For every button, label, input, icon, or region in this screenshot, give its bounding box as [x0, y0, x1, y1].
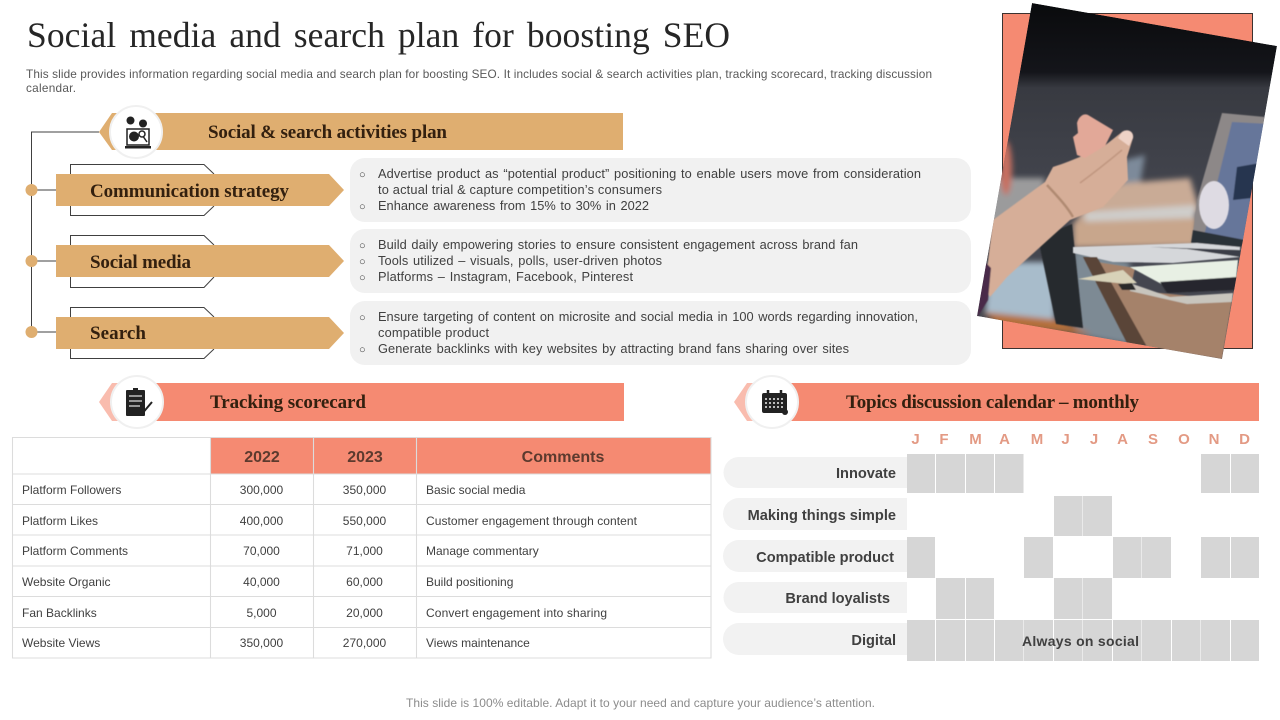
- category: social media: Social media: [90, 252, 192, 273]
- table 2023 values: 350,000: [343, 483, 387, 497]
- calendar row: digital: Always on social: [1022, 633, 1139, 649]
- calendar row: innovate: Innovate: [836, 466, 896, 482]
- table comments: [426, 483, 638, 650]
- table 2022 values: 400,000: [240, 514, 284, 528]
- panel: social media bullets: ○: [359, 272, 366, 284]
- table row labels: [22, 483, 128, 650]
- table 2022 values: 300,000: [240, 483, 284, 497]
- month labels: [911, 431, 1250, 448]
- month labels: A: [1117, 431, 1128, 448]
- calendar row: digital: [723, 620, 1259, 661]
- calendar row: innovate: [724, 454, 1259, 493]
- table 2023 values: [343, 483, 387, 650]
- panel: communication bullets: Advertise product as “potential product” positioning to enable users move from consideration: [378, 166, 921, 181]
- social and search header banner: Social & search activities plan: [208, 122, 447, 143]
- category: social media: [56, 236, 344, 288]
- table row labels: Website Views: [22, 636, 100, 650]
- table 2023 values: 270,000: [343, 636, 387, 650]
- month labels: D: [1239, 431, 1250, 448]
- month labels: F: [939, 431, 949, 448]
- month labels: A: [999, 431, 1010, 448]
- table header: Comments: [522, 449, 604, 466]
- icon: laptop with social search: [125, 116, 151, 148]
- panel: search bullets: compatible product: [378, 325, 489, 340]
- panel: social media bullets: Build daily empowering stories to ensure consistent engagement across brand fan: [378, 237, 858, 252]
- panel: social media bullets: Tools utilized – visuals, polls, user-driven photos: [378, 253, 662, 268]
- tracking scorecard banner: [99, 376, 624, 428]
- table row labels: Platform Likes: [22, 514, 98, 528]
- table: tracking scorecard: [12, 438, 711, 658]
- table comments: Customer engagement through content: [426, 514, 638, 528]
- calendar row: compatible product: Compatible product: [756, 550, 894, 566]
- tracking scorecard banner: Tracking scorecard: [210, 392, 366, 413]
- table row labels: Website Organic: [22, 575, 110, 589]
- category: search: [56, 308, 344, 358]
- table 2023 values: 60,000: [346, 575, 383, 589]
- table row labels: Platform Comments: [22, 544, 128, 558]
- table 2022 values: 40,000: [243, 575, 280, 589]
- topics calendar banner: Topics discussion calendar – monthly: [846, 392, 1140, 413]
- laptop: [1073, 113, 1270, 359]
- dark column under arm: [1038, 224, 1083, 328]
- photo panel: [977, 3, 1277, 359]
- panel: social media bullets: ○: [359, 240, 366, 252]
- month labels: M: [1031, 431, 1043, 448]
- table row labels: Platform Followers: [22, 483, 121, 497]
- topics calendar banner: [734, 376, 1259, 428]
- icon: clipboard: [126, 388, 152, 416]
- panel: communication bullets: ○: [359, 169, 366, 181]
- panel: search bullets: Ensure targeting of content on microsite and social media in 100 words regarding innovation,: [378, 309, 918, 324]
- table comments: Views maintenance: [426, 636, 530, 650]
- panel: social media bullets: Platforms – Instagram, Facebook, Pinterest: [378, 269, 633, 284]
- table comments: Basic social media: [426, 483, 526, 497]
- table 2022 values: [240, 483, 284, 650]
- panel: communication bullets: ○: [359, 201, 366, 213]
- table comments: Build positioning: [426, 575, 513, 589]
- table 2023 values: 71,000: [346, 544, 383, 558]
- month labels: M: [969, 431, 982, 448]
- month labels: S: [1148, 431, 1158, 448]
- social and search header banner: [99, 106, 623, 158]
- table 2022 values: 5,000: [246, 606, 277, 620]
- calendar row: digital: Digital: [851, 633, 896, 649]
- table row labels: Fan Backlinks: [22, 606, 97, 620]
- table comments: Convert engagement into sharing: [426, 606, 607, 620]
- month labels: N: [1209, 431, 1219, 448]
- footer note: This slide is 100% editable. Adapt it to your need and capture your audience’s attention.: [406, 696, 875, 710]
- table 2022 values: 70,000: [243, 544, 280, 558]
- calendar row: brand loyalists: Brand loyalists: [785, 591, 890, 607]
- table header: 2022: [244, 449, 280, 466]
- table 2022 values: 350,000: [240, 636, 284, 650]
- panel: communication bullets: [350, 158, 971, 222]
- timeline connector: [26, 132, 99, 338]
- table 2023 values: 550,000: [343, 514, 387, 528]
- calendar row: compatible product: [723, 537, 1259, 578]
- hand: [977, 114, 1133, 318]
- subtitle text: This slide provides information regarding social media and search plan for boosting SEO. It includes social & search activities plan, tracking scorecard, tracking discussion: [26, 67, 932, 81]
- panel: communication bullets: Enhance awareness from 15% to 30% in 2022: [378, 198, 649, 213]
- month labels: J: [911, 431, 920, 448]
- category: communication strategy: [56, 164, 344, 216]
- calendar row: making things simple: Making things simple: [748, 508, 896, 524]
- subtitle text: [26, 67, 932, 95]
- panel: search bullets: [350, 301, 971, 365]
- subtitle text: calendar.: [26, 81, 76, 95]
- icon: calendar: [762, 390, 788, 415]
- table header: [244, 449, 604, 466]
- month labels: J: [1061, 431, 1070, 448]
- panel: communication bullets: to actual trial & capture competition’s consumers: [378, 182, 662, 197]
- month labels: O: [1178, 431, 1190, 448]
- calendar row: brand loyalists: [724, 578, 1112, 619]
- table 2023 values: 20,000: [346, 606, 383, 620]
- panel: social media bullets: ○: [359, 256, 366, 268]
- table header: 2023: [347, 449, 383, 466]
- panel: search bullets: ○: [359, 344, 366, 356]
- table comments: Manage commentary: [426, 544, 539, 558]
- calendar row: making things simple: [723, 496, 1112, 536]
- panel: search bullets: Generate backlinks with key websites by attracting brand fans sharing over sites: [378, 341, 849, 356]
- category: communication strategy: Communication strategy: [90, 181, 290, 202]
- category: search: Search: [90, 323, 146, 344]
- month labels: J: [1090, 431, 1098, 448]
- panel: social media bullets: [350, 229, 971, 293]
- title: Social media and search plan for boosting SEO: [27, 15, 730, 55]
- panel: search bullets: ○: [359, 312, 366, 324]
